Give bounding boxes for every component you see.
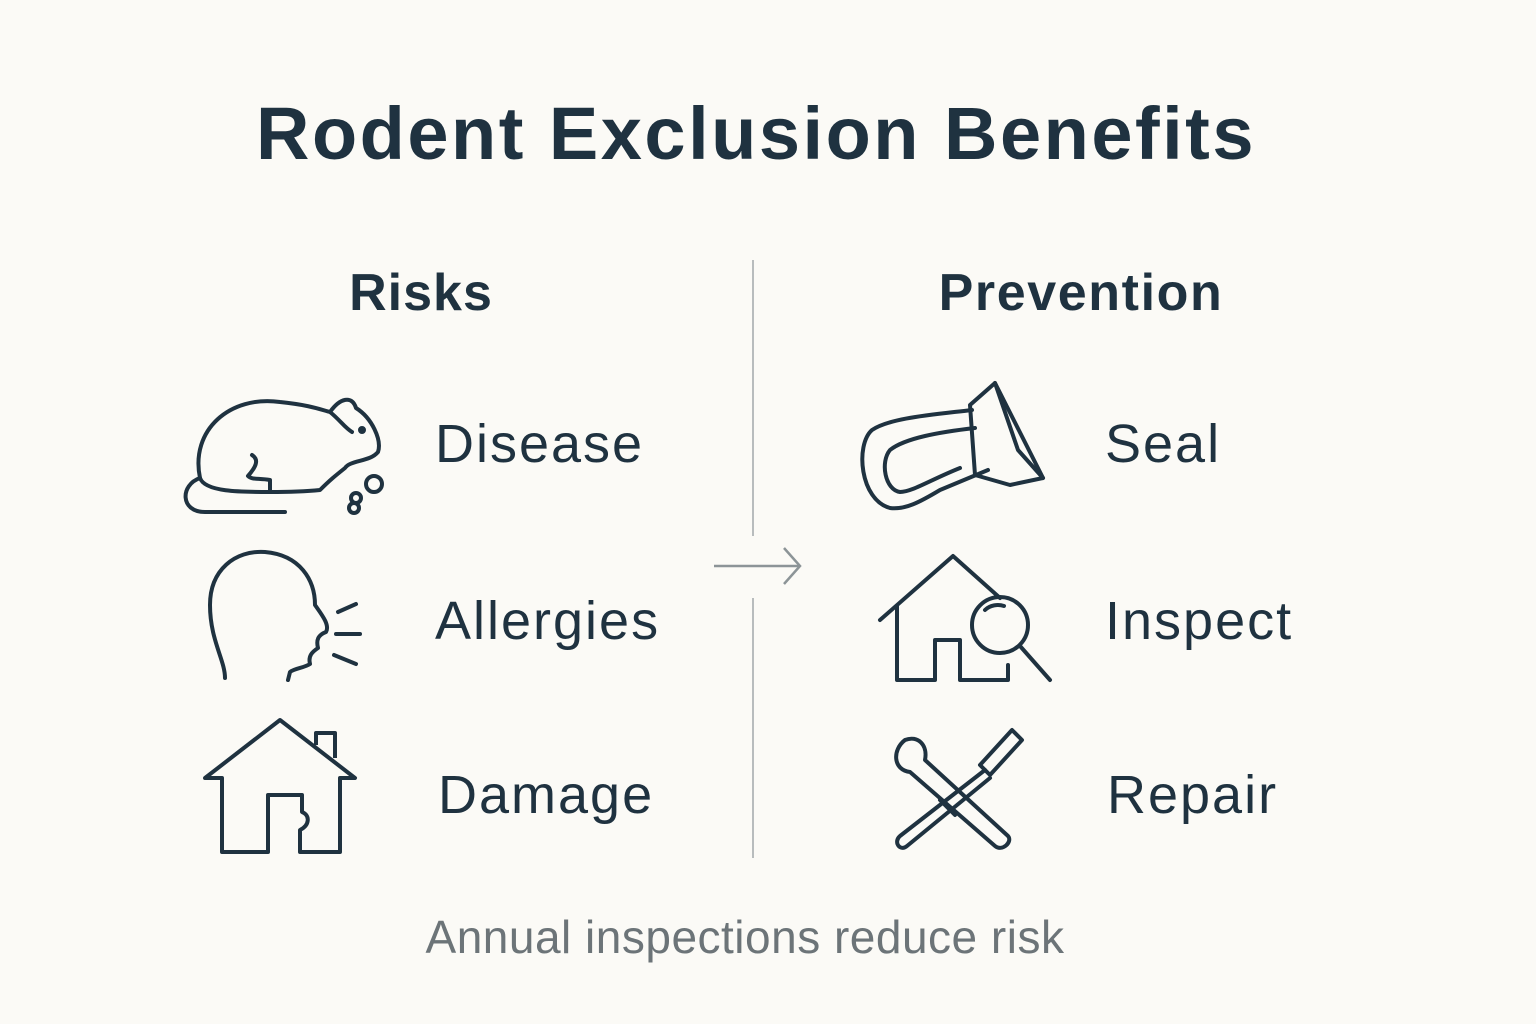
icon: house with magnifier xyxy=(878,554,1052,682)
label: Inspect: Inspect xyxy=(1105,591,1293,651)
icon: damaged house xyxy=(203,718,358,854)
icon: head sneezing xyxy=(208,550,362,682)
heading: Prevention: Prevention xyxy=(939,264,1223,322)
icon: wrench and screwdriver xyxy=(894,728,1024,850)
label: Allergies: Allergies xyxy=(435,591,660,651)
divider with arrow xyxy=(714,260,802,858)
title: Rodent Exclusion Benefits xyxy=(256,92,1256,175)
label: Damage: Damage xyxy=(438,765,654,825)
footer note: Annual inspections reduce risk xyxy=(426,911,1064,963)
label: Disease: Disease xyxy=(435,414,644,474)
icon: rat xyxy=(184,398,384,515)
heading: Risks: Risks xyxy=(349,264,493,322)
icon: caulk gun xyxy=(860,380,1046,510)
label: Seal: Seal xyxy=(1105,414,1221,474)
label: Repair: Repair xyxy=(1107,765,1278,825)
arrow xyxy=(714,548,800,584)
